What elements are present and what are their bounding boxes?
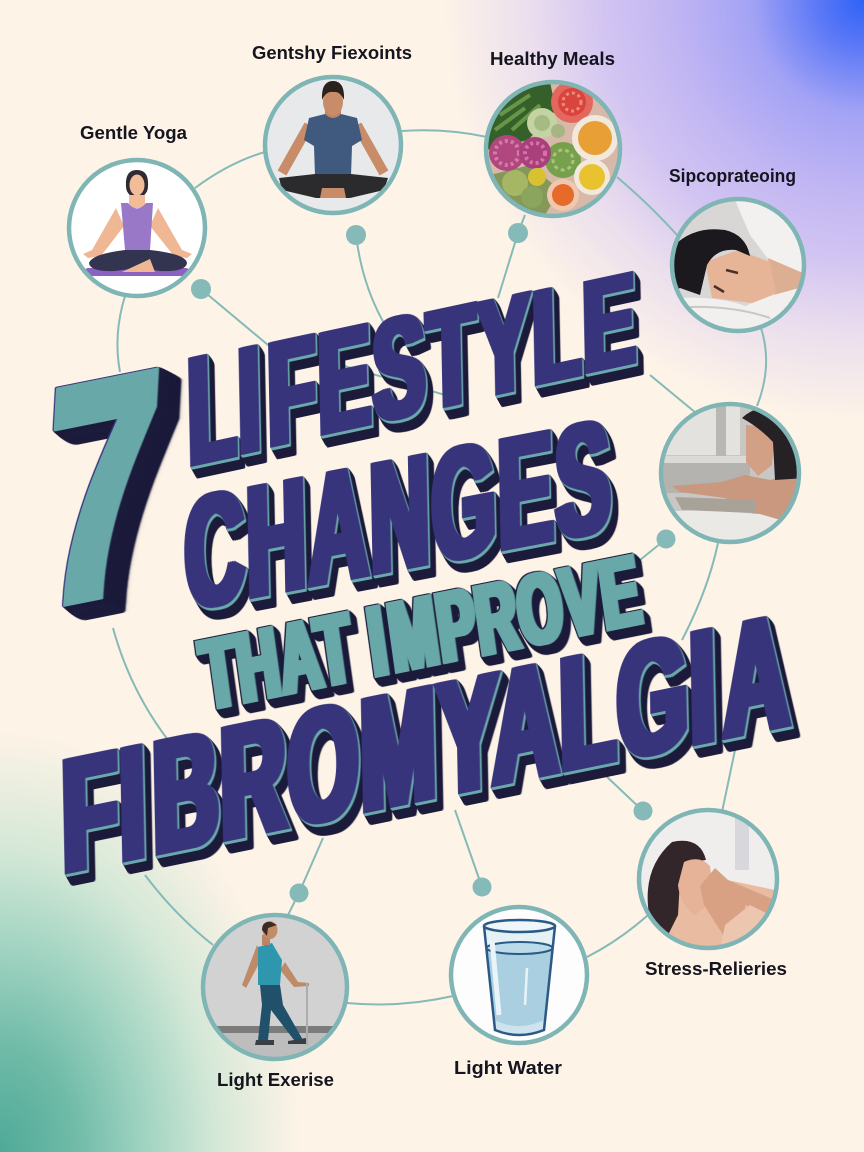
icon: stress relief woman (630, 805, 790, 955)
icon: gentle yoga woman (66, 158, 208, 298)
title line: FIBROMYALGIA: I (685, 594, 716, 779)
title line: LIFESTYLE: I (234, 313, 262, 486)
icon: person resting at table (655, 400, 805, 550)
title line: LIFESTYLE: S (368, 282, 426, 453)
label: Healthy Meals: Healthy Meals (490, 49, 615, 69)
icon: glass of water (451, 907, 587, 1043)
title line: LIFESTYLE: L (528, 254, 581, 413)
title line: LIFESTYLE: E (579, 244, 636, 401)
label: Sipcoprateoing: Sipcoprateoing (669, 166, 796, 186)
title line: LIFESTYLE: T (423, 273, 477, 439)
title line: LIFESTYLE (183, 244, 644, 498)
label: Light Water: Light Water (454, 1058, 562, 1078)
circular illustrations and labels (66, 46, 806, 1090)
title line: LIFESTYLE: Y (473, 263, 531, 427)
title line: THAT IMPROVE: THAT MPROVE (192, 534, 645, 731)
label: Gentle Yoga: Gentle Yoga (80, 123, 188, 143)
icon: seated meditation man (260, 70, 410, 220)
label: Gentshy Fiexoints: Gentshy Fiexoints (252, 43, 412, 63)
label: Stress-Relieries: Stress-Relieries (645, 959, 787, 979)
numeral 7: 7 (34, 305, 161, 675)
label: Light Exerise: Light Exerise (217, 1070, 334, 1090)
title line: CHANGES: CHANGES (180, 387, 611, 644)
title line: LIFESTYLE: L (183, 317, 237, 498)
title line: LIFESTYLE: E (314, 293, 372, 466)
title line: THAT IMPROVE: I (360, 585, 392, 698)
icon: light exercise walker (200, 910, 350, 1065)
icon: restful sleep (668, 195, 810, 335)
title line: FIBROMYALGIA: FBROMYALGA (57, 579, 789, 907)
title line: LIFESTYLE: F (263, 303, 317, 478)
title line: FIBROMYALGIA: I (115, 711, 146, 895)
icon: healthy meals (485, 80, 625, 220)
